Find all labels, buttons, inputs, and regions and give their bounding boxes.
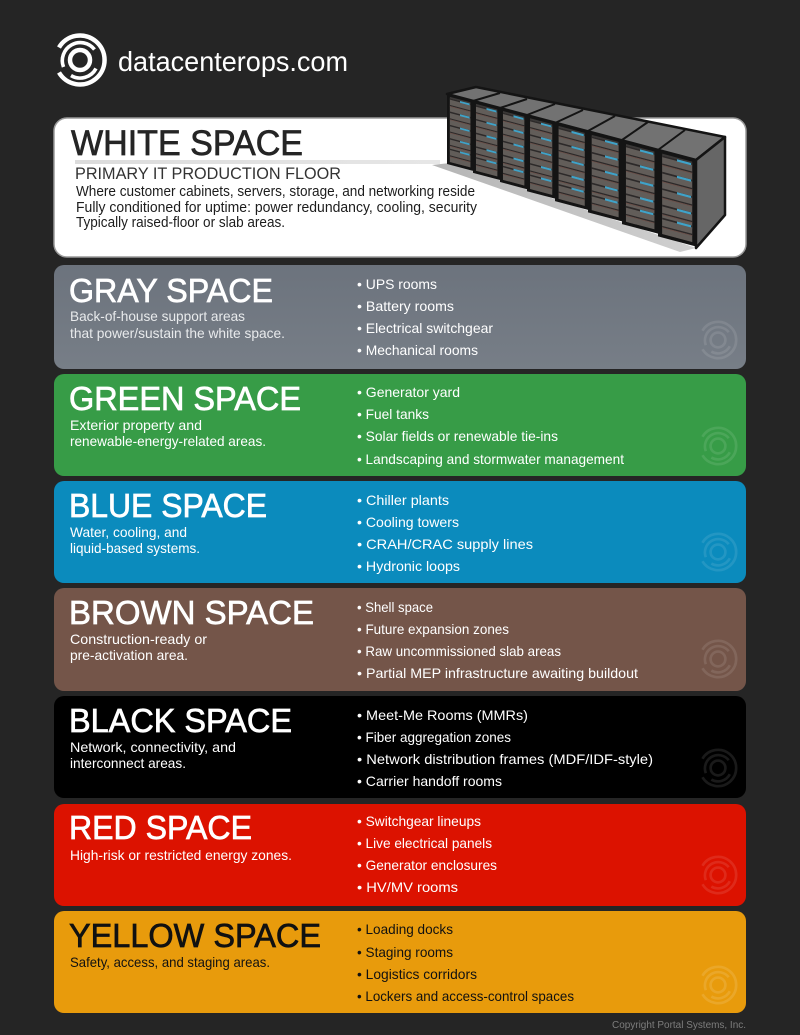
rack top face bbox=[447, 87, 725, 160]
heading: white space: WHITE SPACE bbox=[71, 124, 303, 163]
heading: black space: BLACK SPACE bbox=[69, 702, 292, 739]
top dividers bbox=[473, 93, 685, 150]
list: • Loading docks bbox=[357, 921, 453, 937]
heading: blue space: BLUE SPACE bbox=[69, 487, 267, 524]
rack side face bbox=[696, 137, 725, 248]
description: Construction-ready or bbox=[70, 631, 207, 647]
panel: black space bbox=[54, 696, 746, 798]
icon: watermark bbox=[702, 967, 736, 1003]
panel: yellow space bbox=[54, 911, 746, 1013]
list: • Logistics corridors bbox=[357, 966, 477, 982]
description bbox=[70, 631, 207, 663]
icon: watermark bbox=[702, 322, 736, 358]
rack fronts bbox=[447, 94, 696, 246]
list: • CRAH/CRAC supply lines bbox=[357, 536, 533, 552]
list bbox=[357, 599, 638, 681]
description: Typically raised-floor or slab areas. bbox=[76, 214, 285, 231]
panel: red space bbox=[54, 804, 746, 906]
description: pre-activation area. bbox=[70, 647, 188, 663]
icon: watermark bbox=[702, 641, 736, 677]
panel: gray space bbox=[54, 265, 746, 369]
description bbox=[70, 524, 200, 556]
description: Safety, access, and staging areas. bbox=[70, 954, 270, 970]
heading: red space: RED SPACE bbox=[69, 809, 252, 846]
list: • Landscaping and stormwater management bbox=[357, 451, 624, 467]
list: • Live electrical panels bbox=[357, 835, 492, 851]
copyright: Copyright Portal Systems, Inc. bbox=[612, 1020, 746, 1031]
description bbox=[70, 417, 266, 449]
list: • Generator enclosures bbox=[357, 857, 497, 873]
heading: brown space: BROWN SPACE bbox=[69, 594, 314, 631]
list: • Raw uncommissioned slab areas bbox=[357, 643, 561, 659]
list: • Fuel tanks bbox=[357, 406, 429, 422]
panel: brown space bbox=[54, 588, 746, 691]
floor shadow bbox=[432, 163, 696, 252]
description: that power/sustain the white space. bbox=[70, 325, 285, 341]
list: • Staging rooms bbox=[357, 944, 453, 960]
list: • UPS rooms bbox=[357, 276, 437, 292]
list bbox=[357, 921, 574, 1004]
list: • Solar fields or renewable tie-ins bbox=[357, 428, 558, 444]
list: • Mechanical rooms bbox=[357, 342, 478, 358]
list: • Lockers and access-control spaces bbox=[357, 988, 574, 1004]
panel: white space bbox=[54, 118, 746, 257]
heading: green space: GREEN SPACE bbox=[69, 380, 301, 417]
list: • Meet-Me Rooms (MMRs) bbox=[357, 707, 528, 723]
description bbox=[76, 183, 477, 231]
description bbox=[70, 308, 285, 341]
list: • Generator yard bbox=[357, 384, 460, 400]
list bbox=[357, 384, 624, 467]
panel: green space bbox=[54, 374, 746, 476]
description: High-risk or restricted energy zones. bbox=[70, 847, 292, 863]
list bbox=[357, 492, 533, 574]
heading: gray space: GRAY SPACE bbox=[69, 272, 273, 309]
icon: watermark bbox=[702, 534, 736, 570]
subheading: PRIMARY IT PRODUCTION FLOOR bbox=[75, 164, 341, 183]
list: • Fiber aggregation zones bbox=[357, 729, 511, 745]
site name: datacenterops.com bbox=[118, 46, 348, 77]
list: • Carrier handoff rooms bbox=[357, 773, 502, 789]
heading: yellow space: YELLOW SPACE bbox=[69, 917, 321, 954]
list: • Switchgear lineups bbox=[357, 813, 481, 829]
icon: watermark bbox=[702, 750, 736, 786]
list: • Hydronic loops bbox=[357, 558, 460, 574]
list: • Network distribution frames (MDF/IDF-style) bbox=[357, 751, 653, 767]
list bbox=[357, 276, 493, 358]
list: • HV/MV rooms bbox=[357, 879, 458, 895]
icon: watermark bbox=[702, 857, 736, 893]
list bbox=[357, 813, 497, 895]
icon: watermark bbox=[702, 428, 736, 464]
description: Exterior property and bbox=[70, 417, 202, 433]
divider under heading bbox=[75, 160, 440, 164]
description: Back-of-house support areas bbox=[70, 308, 245, 324]
list: • Future expansion zones bbox=[357, 621, 509, 637]
list bbox=[357, 707, 653, 789]
list: • Partial MEP infrastructure awaiting buildout bbox=[357, 665, 638, 681]
description bbox=[70, 739, 236, 771]
list: • Shell space bbox=[357, 599, 433, 615]
description: liquid-based systems. bbox=[70, 540, 200, 556]
description: Fully conditioned for uptime: power redundancy, cooling, security bbox=[76, 199, 477, 216]
logo: datacenterops.com bbox=[59, 36, 348, 84]
panel: blue space bbox=[54, 481, 746, 583]
list: • Chiller plants bbox=[357, 492, 449, 508]
list: • Cooling towers bbox=[357, 514, 459, 530]
description: Water, cooling, and bbox=[70, 524, 187, 540]
description: Network, connectivity, and bbox=[70, 739, 236, 755]
icon: concentric rings logo bbox=[59, 36, 105, 84]
illustration: server rack row bbox=[432, 87, 725, 252]
description: renewable-energy-related areas. bbox=[70, 433, 266, 449]
list: • Electrical switchgear bbox=[357, 320, 493, 336]
description: interconnect areas. bbox=[70, 755, 186, 771]
list: • Battery rooms bbox=[357, 298, 454, 314]
description: Where customer cabinets, servers, storage, and networking reside bbox=[76, 183, 475, 200]
